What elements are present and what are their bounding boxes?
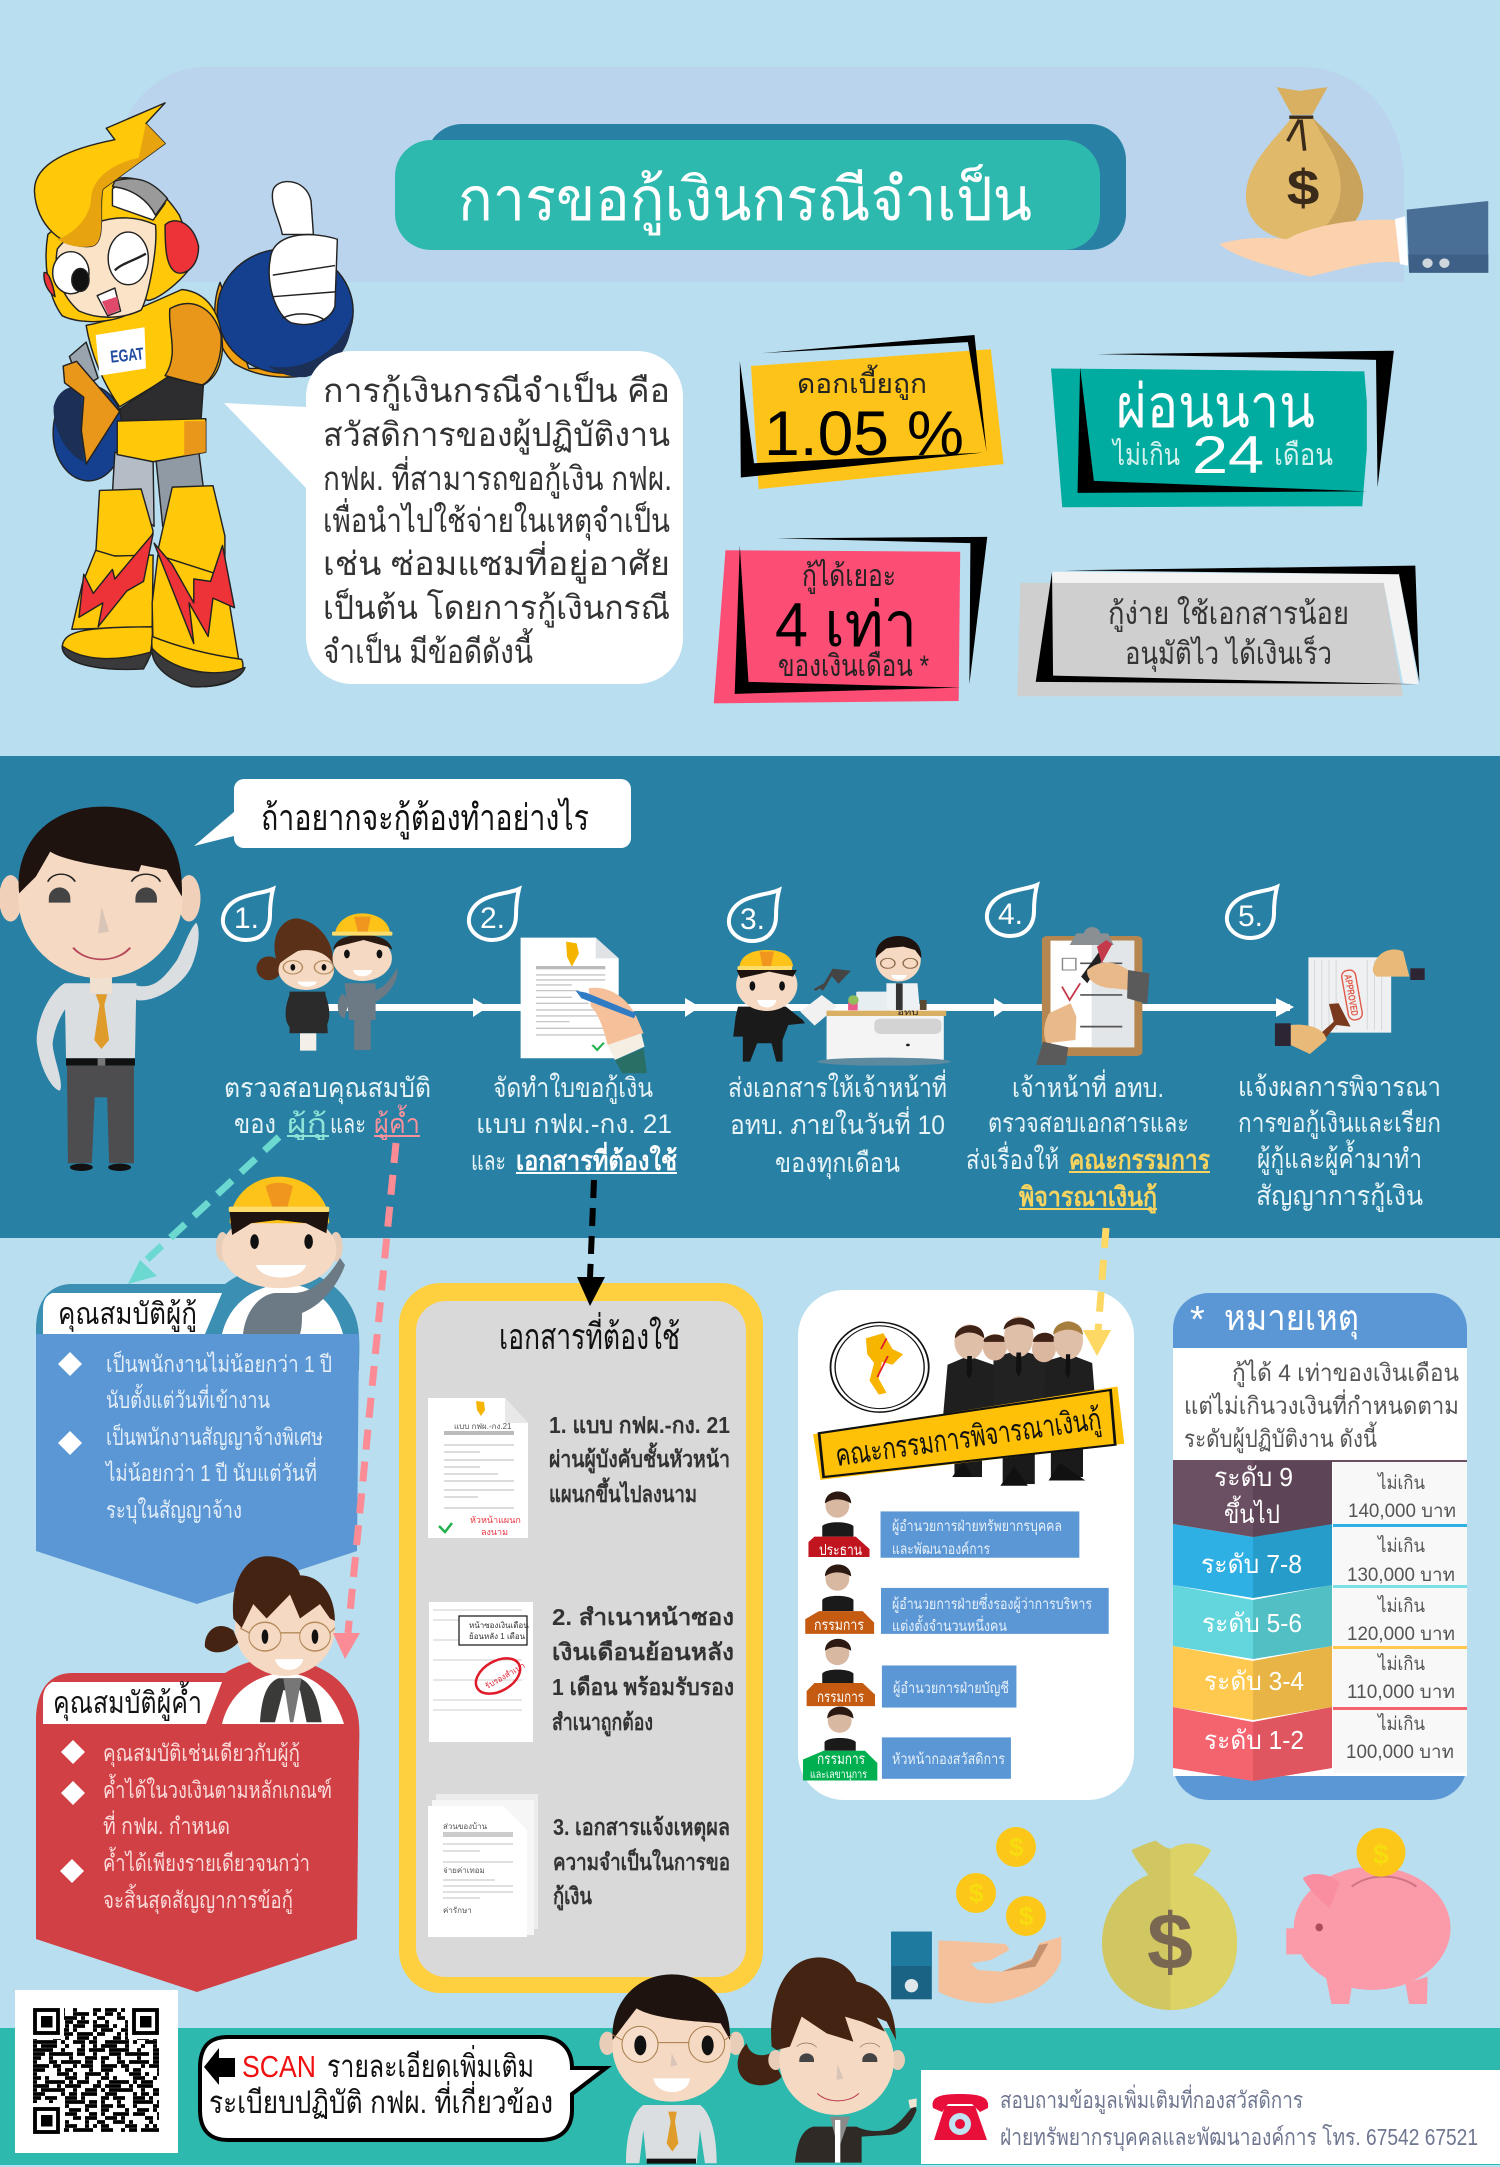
icon: red telephone: [933, 2094, 988, 2140]
icon: piggy bank: $: [1373, 1839, 1389, 1870]
dashed arrow: borrower: [128, 1137, 279, 1284]
panel: loan committee: ผู้อำนวยการฝ่ายบัญชี: [893, 1680, 1009, 1697]
panel: loan committee: คณะกรรมการพิจารณาเงินกู้: [833, 1403, 1104, 1474]
step 1 badge: 1.: [234, 902, 259, 935]
step text: submit documents: อทบ. ภายในวันที่ 10: [730, 1106, 945, 1140]
step text: check qualifications: และ: [330, 1109, 366, 1139]
panel: required documents: 3. เอกสารแจ้งเหตุผล: [553, 1814, 730, 1842]
step text: officer review: คณะกรรมการ: [1069, 1145, 1210, 1175]
panel: loan committee: กรรมการ: [817, 1751, 865, 1768]
document 3 thumbnail: ส่วนของบ้าน: [443, 1822, 488, 1831]
step 5 illustration: approved stamp: [1275, 949, 1425, 1054]
panel: notes and limits table: 120,000 บาท: [1347, 1624, 1455, 1645]
panel: required documents: 1. แบบ กฟผ.-กง. 21: [549, 1412, 730, 1438]
step text: prepare form: [471, 1072, 677, 1176]
step text: officer review: [966, 1069, 1210, 1214]
step 2 badge: [469, 889, 519, 940]
step text: check qualifications: [224, 1073, 431, 1140]
icon: committee members: [943, 1316, 1096, 1486]
footer teal band: [0, 2028, 1500, 2165]
step text: submit documents: [728, 1069, 947, 1180]
icon: money bag on hand: [1219, 87, 1488, 277]
stat box: easy approval: กู้ง่าย ใช้เอกสารน้อย: [1108, 596, 1349, 632]
panel: notes and limits table: ระดับ 7-8: [1201, 1549, 1302, 1579]
panel: notes and limits table: แต่ไม่เกินวงเงินที่กำหนดตาม: [1184, 1389, 1459, 1420]
step text: notify result: [1238, 1072, 1441, 1212]
dashed arrow: documents: [577, 1180, 605, 1306]
panel: notes and limits table: ระดับ 1-2: [1204, 1725, 1304, 1755]
panel: notes and limits table: 110,000 บาท: [1347, 1682, 1455, 1703]
stat box: repayment period: [1051, 351, 1394, 507]
character: presenter man: [0, 807, 200, 1171]
panel: notes and limits table: ระดับ 5-6: [1202, 1608, 1302, 1638]
icon: hand catching coins: [891, 1932, 1061, 2003]
stat box: repayment period: ไม่เกิน: [1111, 437, 1180, 472]
step text: prepare form: เอกสารที่ต้องใช้: [516, 1141, 677, 1176]
step text: notify result: สัญญาการกู้เงิน: [1256, 1181, 1423, 1212]
icon: gold coins: $: [1019, 1901, 1034, 1931]
scan speech bubble: รายละเอียดเพิ่มเติม: [327, 2045, 534, 2084]
stat box: repayment period: 24: [1192, 426, 1264, 485]
step text: prepare form: แบบ กฟผ.-กง. 21: [476, 1109, 672, 1139]
panel: loan committee: ประธาน: [819, 1542, 862, 1559]
stat box: loan multiple: [714, 537, 987, 703]
step 2 illustration: form and pen: [521, 938, 647, 1073]
panel: notes and limits table: ขึ้นไป: [1224, 1495, 1280, 1529]
step text: notify result: ผู้กู้และผู้ค้ำมาทำ: [1257, 1139, 1422, 1175]
panel: guarantor qualifications: คุณสมบัติเช่นเดียวกับผู้กู้: [103, 1740, 300, 1767]
panel: loan committee: [798, 1290, 1134, 1800]
panel: notes and limits table: ไม่เกิน: [1376, 1595, 1425, 1617]
step 5 badge: [1227, 887, 1277, 938]
stat box: repayment period: ผ่อนนาน: [1116, 373, 1315, 440]
document 3 thumbnail: ค่ารักษา: [443, 1906, 472, 1915]
document 1 thumbnail: แบบ กฟผ.-กง.21: [454, 1422, 512, 1431]
header backdrop pill: [120, 67, 1404, 282]
panel: notes and limits table: *: [1190, 1299, 1205, 1341]
panel: loan committee: และพัฒนาองค์การ: [892, 1541, 990, 1558]
man jacket and raised arm: [243, 1258, 345, 1334]
step text: check qualifications: ผู้กู้: [287, 1109, 327, 1140]
panel: notes and limits table: ไม่เกิน: [1376, 1472, 1425, 1494]
step 3 illustration: submitting documents: อทบ: [897, 1009, 918, 1017]
panel: notes and limits table: กู้ได้ 4 เท่าของเงินเดือน: [1232, 1359, 1459, 1388]
panel: guarantor qualifications: จะสิ้นสุดสัญญาการข้อกู้: [103, 1884, 293, 1914]
panel: borrower qualifications: ไม่น้อยกว่า 1 ปี นับแต่วันที่: [104, 1457, 317, 1486]
dashed arrow: committee: [1083, 1228, 1111, 1356]
panel: borrower qualifications: ระบุในสัญญาจ้าง: [106, 1497, 242, 1524]
panel: borrower qualifications: เป็นพนักงานสัญญาจ้างพิเศษ: [106, 1422, 323, 1450]
stat box: easy approval: อนุมัติไว ได้เงินเร็ว: [1125, 635, 1332, 673]
stat box: interest rate: ดอกเบี้ยถูก: [797, 364, 927, 400]
step text: check qualifications: ของ: [234, 1109, 276, 1139]
panel: required documents: เอกสารที่ต้องใช้: [499, 1312, 680, 1357]
panel: loan committee: แต่งตั้งจำนวนหนึ่งคน: [892, 1615, 1007, 1635]
panel: loan committee: กรรมการ: [814, 1617, 864, 1634]
stat box: loan multiple: ของเงินเดือน *: [778, 650, 929, 683]
panel: loan committee: ผู้อำนวยการฝ่ายซึ่งรองผู้ว่าการบริหาร: [892, 1593, 1092, 1613]
icon: piggy bank: [1286, 1828, 1451, 2004]
panel: borrower qualifications: เป็นพนักงานไม่น้อยกว่า 1 ปี: [106, 1349, 332, 1377]
scan speech bubble: ระเบียบปฏิบัติ กฟผ. ที่เกี่ยวข้อง: [209, 2081, 553, 2120]
step text: notify result: การขอกู้เงินและเรียก: [1238, 1108, 1441, 1139]
scan speech bubble: [200, 2037, 606, 2140]
panel: required documents: ผ่านผู้บังคับชั้นหัวหน้า: [549, 1442, 730, 1474]
panel: notes and limits table: ไม่เกิน: [1376, 1653, 1425, 1675]
panel: required documents: [399, 1283, 763, 1993]
panel: borrower qualifications: [36, 1177, 359, 1604]
panel: required documents: สำเนาถูกต้อง: [552, 1709, 653, 1737]
step text: officer review: พิจารณาเงินกู้: [1019, 1182, 1157, 1214]
contact panel: [921, 2070, 1500, 2164]
document 1 thumbnail: [428, 1398, 528, 1538]
panel: guarantor qualifications: คุณสมบัติผู้ค้ำ: [53, 1681, 202, 1722]
panel: borrower qualifications: คุณสมบัติผู้กู้: [58, 1298, 197, 1333]
panel: required documents: เงินเดือนย้อนหลัง: [552, 1639, 734, 1665]
panel: loan committee: ผู้อำนวยการฝ่ายทรัพยากรบุคคล: [892, 1518, 1062, 1536]
character: man with glasses: [599, 1974, 744, 2164]
stat box: interest rate: [740, 335, 1004, 489]
document 2 thumbnail: หน้าซองเงินเดือน: [469, 1621, 529, 1630]
document 1 thumbnail: หัวหน้าแผนก: [470, 1515, 521, 1525]
stat box: loan multiple: 4 เท่า: [775, 591, 917, 660]
document 1 thumbnail: ลงนาม: [481, 1527, 508, 1537]
step text: check qualifications: ผู้ค้ำ: [374, 1104, 420, 1140]
panel: notes and limits table: ไม่เกิน: [1376, 1713, 1425, 1735]
limits: white cells: [1173, 1460, 1467, 1773]
icon: money sack: [1102, 1841, 1237, 2010]
row 3 rect: [882, 1665, 1016, 1708]
icon: money sack: $: [1147, 1897, 1193, 1986]
panel: required documents: แผนกขึ้นไปลงนาม: [549, 1477, 697, 1507]
step 4 illustration: checklist clipboard: [1036, 927, 1150, 1065]
panel: loan committee: และเลขานุการ: [810, 1769, 867, 1781]
panel: required documents: 2. สำเนาหน้าซอง: [552, 1604, 734, 1630]
chair person icon: [808, 1492, 870, 1557]
speech bubble: definition: การกู้เงินกรณีจำเป็น คือ: [323, 371, 670, 411]
panel: required documents: 1 เดือน พร้อมรับรอง: [552, 1674, 734, 1700]
character: woman: [738, 1957, 917, 2163]
panel: notes and limits table: หมายเหตุ: [1224, 1297, 1359, 1340]
step 5 badge: 5.: [1238, 900, 1263, 933]
step 3 illustration: submitting documents: [733, 936, 951, 1066]
title: การขอกู้เงินกรณีจำเป็น: [458, 164, 1032, 236]
step 3 badge: 3.: [740, 903, 765, 936]
step text: submit documents: ของทุกเดือน: [775, 1148, 900, 1180]
panel: notes and limits table: 140,000 บาท: [1348, 1501, 1456, 1522]
title: [395, 124, 1126, 250]
character: EGAT robot mascot: EGAT: [109, 343, 145, 367]
panel: notes and limits table: 130,000 บาท: [1347, 1565, 1455, 1586]
stat box: repayment period: เดือน: [1274, 439, 1333, 472]
panel: guarantor qualifications: ที่ กฟผ. กำหนด: [103, 1810, 230, 1839]
dashed arrow: guarantor: [333, 1143, 396, 1659]
panel: guarantor qualifications: ค้ำได้เพียงรายเดียวจนกว่า: [103, 1847, 310, 1876]
committee member icon 1: [805, 1564, 874, 1634]
step text: prepare form: และ: [471, 1146, 506, 1176]
character: EGAT robot mascot: [34, 103, 353, 687]
level chevrons: [1173, 1461, 1332, 1781]
document 3 thumbnail: [428, 1794, 538, 1937]
document 2 thumbnail: [429, 1602, 533, 1742]
icon: helmeted man: [216, 1177, 343, 1288]
speech bubble: how to borrow: [194, 779, 631, 848]
step 3 badge: [729, 890, 779, 941]
panel: notes and limits table: [1173, 1293, 1467, 1800]
speech bubble: definition: [224, 351, 683, 684]
step text: notify result: แจ้งผลการพิจารณา: [1238, 1072, 1441, 1102]
speech bubble: definition: เพื่อนำไปใช้จ่ายในเหตุจำเป็น: [323, 498, 670, 541]
speech bubble: definition: จำเป็น มีข้อดีดังนี้: [323, 628, 534, 670]
step text: submit documents: ส่งเอกสารให้เจ้าหน้าที่: [728, 1069, 947, 1103]
panel: notes and limits table: ไม่เกิน: [1376, 1535, 1425, 1557]
stat box: interest rate: 1.05 %: [764, 399, 964, 469]
step text: officer review: ตรวจสอบเอกสารและ: [988, 1108, 1189, 1138]
panel: borrower qualifications: นับตั้งแต่วันที่เข้างาน: [106, 1384, 270, 1413]
panel: loan committee: หัวหน้ากองสวัสดิการ: [892, 1751, 1005, 1768]
step text: officer review: ส่งเรื่องให้: [966, 1141, 1059, 1175]
contact panel: สอบถามข้อมูลเพิ่มเติมที่กองสวัสดิการ: [1000, 2084, 1303, 2114]
panel: notes and limits table: 100,000 บาท: [1346, 1742, 1454, 1763]
document 2 thumbnail: รับรองสำเนา: [484, 1661, 527, 1691]
icon: money bag on hand: $: [1287, 160, 1320, 216]
speech bubble: how to borrow: ถ้าอยากจะกู้ต้องทำอย่างไร: [261, 797, 589, 840]
icon: gold coins: $: [969, 1878, 984, 1908]
row 2 rect: [881, 1588, 1109, 1634]
step 5 illustration: approved stamp: APPROVED: [1341, 974, 1360, 1017]
step text: check qualifications: ตรวจสอบคุณสมบัติ: [224, 1073, 431, 1105]
step 1 badge: [223, 889, 273, 940]
panel: guarantor qualifications: ค้ำได้ในวงเงินตามหลักเกณฑ์: [103, 1774, 332, 1803]
icon: gold coins: [956, 1827, 1046, 1936]
QR code: [15, 1990, 178, 2153]
document 2 thumbnail: ย้อนหลัง 1 เดือน: [469, 1632, 526, 1641]
process arrow line: [325, 998, 1294, 1017]
step text: officer review: เจ้าหน้าที่ อทบ.: [1012, 1069, 1164, 1103]
step 1 illustration: employees: [256, 913, 397, 1051]
icon: gold coins: $: [1009, 1832, 1024, 1862]
step 4 badge: 4.: [998, 898, 1023, 931]
banner: committee title: [813, 1386, 1124, 1480]
speech bubble: definition: สวัสดิการของผู้ปฏิบัติงาน: [323, 416, 670, 455]
scan speech bubble: SCAN: [242, 2049, 316, 2084]
committee member icon 2: [807, 1639, 875, 1706]
step 2 badge: 2.: [480, 902, 505, 935]
committee secretary icon: [803, 1707, 877, 1781]
panel: required documents: กู้เงิน: [553, 1883, 592, 1911]
panel: loan committee: กรรมการ: [817, 1689, 864, 1706]
step 4 badge: [987, 885, 1037, 936]
icon: woman with glasses: [205, 1556, 335, 1722]
stat box: loan multiple: กู้ได้เยอะ: [802, 558, 896, 594]
speech bubble: definition: กฟผ. ที่สามารถขอกู้เงิน กฟผ.: [323, 456, 672, 499]
panel: notes and limits table: ระดับ 9: [1214, 1462, 1293, 1492]
panel: notes and limits table: ระดับ 3-4: [1204, 1666, 1304, 1696]
speech bubble: definition: เป็นต้น โดยการกู้เงินกรณี: [323, 588, 670, 628]
panel: guarantor qualifications: [36, 1556, 359, 1992]
icon: committee logo: [831, 1322, 929, 1412]
panel: notes and limits table: ระดับผู้ปฏิบัติงาน ดังนี้: [1184, 1421, 1377, 1454]
row 1 rect: [881, 1511, 1079, 1558]
panel: required documents: ความจำเป็นในการขอ: [553, 1847, 730, 1875]
step text: prepare form: จัดทำใบขอกู้เงิน: [493, 1072, 653, 1104]
row 4 rect: [882, 1737, 1011, 1779]
stat box: easy approval: [1017, 566, 1419, 696]
how-to band background: [0, 756, 1500, 1238]
speech bubble: definition: เช่น ซ่อมแซมที่อยู่อาศัย: [323, 541, 670, 584]
document 3 thumbnail: จ่ายค่าเทอม: [443, 1866, 485, 1875]
